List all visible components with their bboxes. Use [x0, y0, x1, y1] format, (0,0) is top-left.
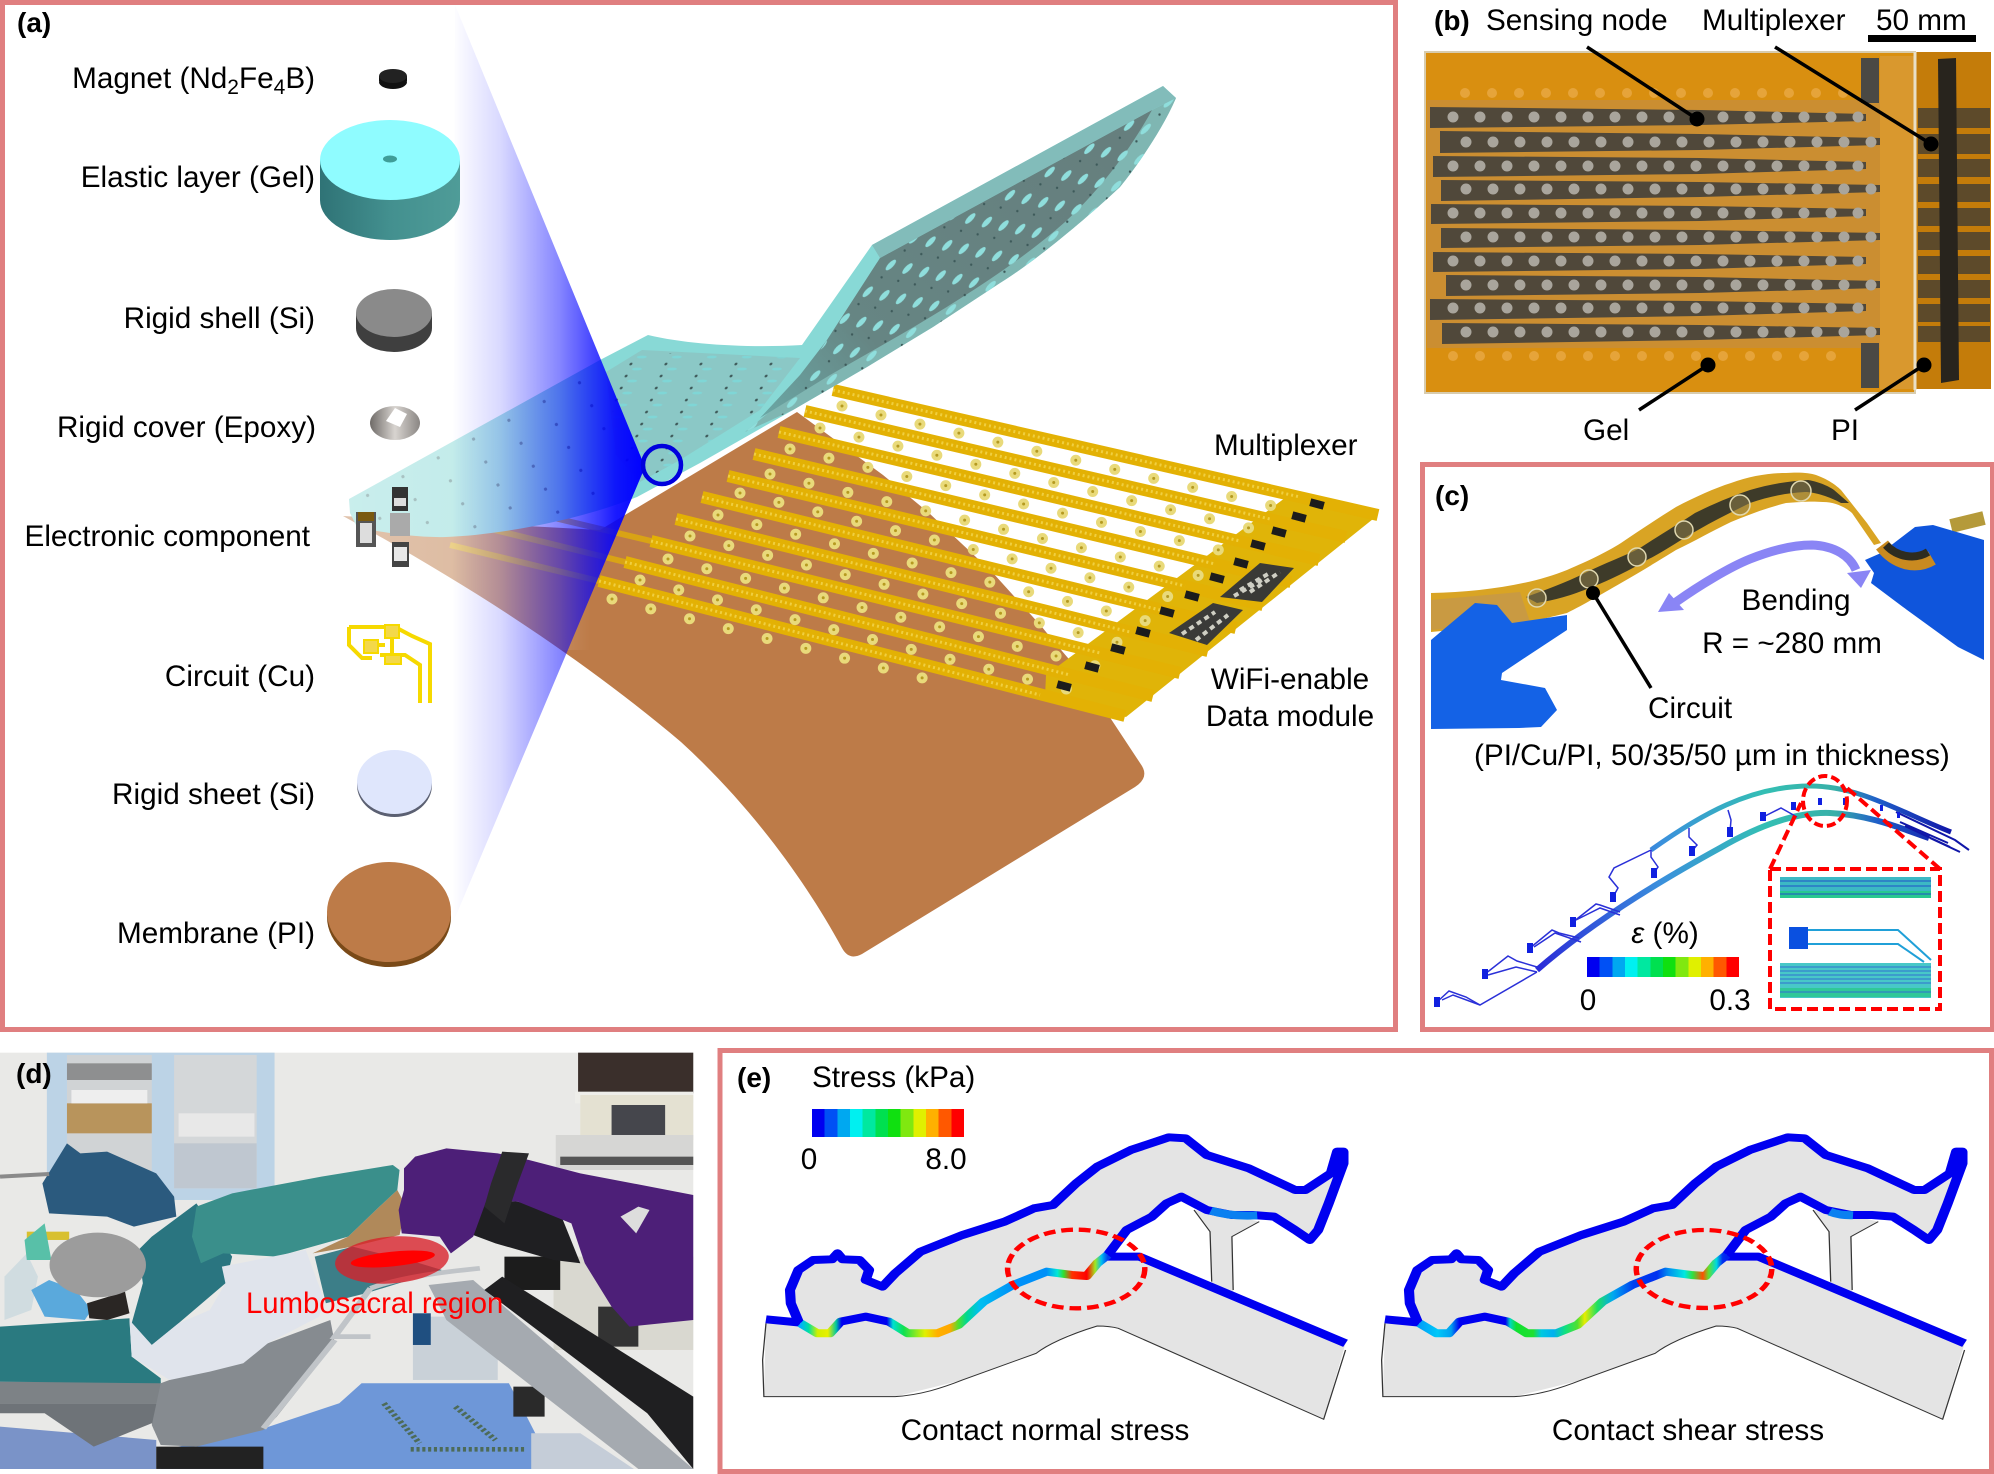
panel c border [1422, 464, 1992, 1030]
teal gown [192, 1165, 400, 1263]
icon: rigid cover ring [370, 406, 420, 440]
hair [87, 1292, 129, 1320]
leg support [469, 1200, 580, 1263]
connector patches [1918, 108, 1990, 342]
bending arrow [1658, 545, 1871, 612]
cabinet [47, 1053, 275, 1200]
PI base [1915, 52, 1991, 389]
lumbosacral highlight [331, 1232, 452, 1288]
label: data module: Data module [1206, 700, 1374, 733]
label: multiplexer: Multiplexer [1214, 429, 1358, 462]
bed frame lower [0, 1403, 161, 1447]
caption: shear stress: Contact shear stress [1552, 1414, 1824, 1447]
layer label: rigid cover: Rigid cover (Epoxy) [57, 411, 316, 444]
photo scene [0, 1053, 693, 1469]
panel a: exploded sensor structure [2, 2, 1396, 1030]
icon: rigid shell disc [356, 289, 432, 352]
face privacy circle [50, 1233, 146, 1297]
panel c: bending test [1422, 464, 1992, 1030]
PI membrane sheet [343, 412, 1144, 956]
head cap [31, 1280, 92, 1320]
outer node rows [1453, 93, 1850, 356]
bed main plate [152, 1320, 335, 1447]
label: gel: Gel [1583, 414, 1629, 447]
muted middle zone [1427, 100, 1915, 348]
panel d label: (d) [16, 1058, 52, 1089]
colour bar max: 0.3 [1709, 984, 1751, 1017]
dark cabinet below board [513, 1387, 545, 1417]
FEA arcs [1537, 786, 1951, 970]
colour bar max: 8.0 [925, 1143, 967, 1176]
panel e: stress simulation [720, 1050, 1992, 1472]
gel underside with holes [745, 98, 1176, 432]
layer label: magnet: Fe [239, 62, 274, 95]
red zoom lines [1770, 788, 1940, 869]
leader: gel [1639, 358, 1716, 410]
device photo [1425, 52, 1991, 393]
metal rails [263, 1268, 480, 1428]
panel b label: (b) [1434, 5, 1470, 36]
FEA strain simulation [1434, 786, 1969, 1007]
panel e label: (e) [737, 1062, 771, 1093]
sensor blocks [1434, 798, 1900, 1007]
right end of strip behind glove [1951, 518, 1984, 526]
layer label: magnet: 4 [274, 76, 286, 99]
blue projection cone [452, 5, 645, 925]
left glove [1431, 603, 1567, 729]
white tags [620, 1207, 650, 1233]
leader: circuit [1586, 586, 1651, 688]
flexible strip [1431, 473, 1881, 632]
normal stress model [763, 1137, 1346, 1419]
layer label: rigid sheet: Rigid sheet (Si) [112, 778, 315, 811]
right tail traces [1896, 812, 1969, 852]
stress colour bar [812, 1109, 964, 1137]
clothing pile [42, 1143, 176, 1227]
layer label: rigid shell: Rigid shell (Si) [124, 302, 315, 335]
icon: elastic gel disc [320, 120, 460, 240]
scale bar label: 50 mm [1876, 4, 1967, 37]
leader: multiplexer [1775, 47, 1938, 152]
colour bar title: Stress (kPa) [812, 1061, 975, 1094]
multiplexer chips [1056, 498, 1325, 692]
purple drape [399, 1148, 693, 1327]
bottom right chassis [531, 1433, 634, 1469]
floor cable stripes [384, 1403, 527, 1449]
inset lower band [1780, 963, 1931, 998]
sensing nodes [1453, 117, 1873, 332]
black multiplexer bar [1938, 58, 1959, 383]
colour bar min: 0 [1580, 984, 1596, 1017]
label: thickness: (PI/Cu/PI, 50/35/50 µm in thickness) [1474, 739, 1950, 772]
icon: magnet [379, 69, 407, 89]
floor [161, 1383, 554, 1469]
panel a label: (a) [17, 7, 51, 38]
icon: rigid sheet disc [357, 750, 432, 817]
black leg board [484, 1277, 693, 1469]
lower wall grate [413, 1317, 498, 1380]
layer label: electronic component: Electronic component [25, 520, 311, 553]
strip end in fingers [1882, 545, 1932, 563]
WiFi data module [1169, 563, 1294, 645]
scale bar [1868, 35, 1976, 42]
label: lumbosacral region: Lumbosacral region [246, 1287, 503, 1320]
gel left dots [349, 360, 620, 537]
layer label: circuit: Circuit (Cu) [165, 660, 315, 693]
panel d: patient photo [0, 1053, 693, 1469]
sensor strips [1430, 107, 1880, 344]
dark end blocks [1861, 58, 1879, 388]
icon: copper circuit [349, 625, 430, 703]
label: bending: Bending [1742, 584, 1850, 617]
skin [312, 1190, 406, 1253]
shear stress model [1382, 1137, 1965, 1419]
layer label: magnet: Magnet (Nd [72, 62, 227, 95]
gel base [1425, 52, 1915, 393]
right glove [1865, 525, 1984, 660]
pale fade on left tip [338, 340, 590, 650]
inset sensor and traces [1789, 927, 1931, 962]
leader: sensing node [1587, 47, 1704, 126]
layer label: elastic layer: Elastic layer (Gel) [81, 161, 315, 194]
label: PI: PI [1831, 414, 1859, 447]
label: bending radius: R = ~280 mm [1702, 627, 1882, 660]
label: multiplexer: Multiplexer [1702, 4, 1846, 37]
layer label: magnet: 2 [227, 76, 239, 99]
icon: electronic components [356, 487, 410, 567]
colour bar min: 0 [801, 1143, 817, 1176]
bed mattress [0, 1318, 161, 1383]
label: circuit: Circuit [1648, 692, 1733, 725]
panel a border [2, 2, 1396, 1030]
sensing coils [1528, 481, 1811, 607]
label: WiFi module: WiFi-enable [1211, 663, 1369, 696]
tubes and bag [0, 1174, 69, 1320]
white sheet [129, 1250, 324, 1380]
bending photo [1431, 473, 1984, 729]
leg strap [484, 1152, 529, 1223]
gel layer peeled upward [349, 86, 1176, 537]
dark teal gown [132, 1203, 232, 1345]
gel rim [872, 86, 1176, 258]
label: sensing node: Sensing node [1486, 4, 1668, 37]
dark under bed [156, 1447, 263, 1469]
zoom circle [643, 446, 681, 484]
metal board [429, 1280, 693, 1469]
panel b: device photograph [1425, 4, 1991, 447]
panel c label: (c) [1435, 480, 1469, 511]
caption: normal stress: Contact normal stress [901, 1414, 1189, 1447]
colour bar title: ε (%) [1631, 917, 1699, 950]
layer label: membrane: Membrane (PI) [117, 917, 315, 950]
strain colour bar [1587, 957, 1739, 977]
gel silhouette [349, 86, 1176, 537]
red dashed circle [1803, 776, 1847, 826]
circuit strips layer [450, 390, 1378, 717]
icon: membrane disc [327, 862, 451, 967]
sensor traces [1437, 808, 1797, 1005]
panel e border [720, 1050, 1992, 1472]
blue handle [413, 1313, 431, 1345]
gel inner flat with dots [606, 350, 800, 482]
strip left tan zone [1431, 592, 1530, 630]
leader: PI [1855, 358, 1932, 410]
inset zoom box [1770, 869, 1940, 1009]
inset upper band [1780, 877, 1931, 898]
strip dark conductor band [1526, 480, 1849, 603]
bed frame side [0, 1382, 161, 1403]
teal lower trunk [315, 1247, 442, 1303]
end band of the circuit sheet [1045, 495, 1378, 717]
equipment stack [504, 1053, 693, 1350]
layer label: magnet: B) [285, 62, 315, 95]
